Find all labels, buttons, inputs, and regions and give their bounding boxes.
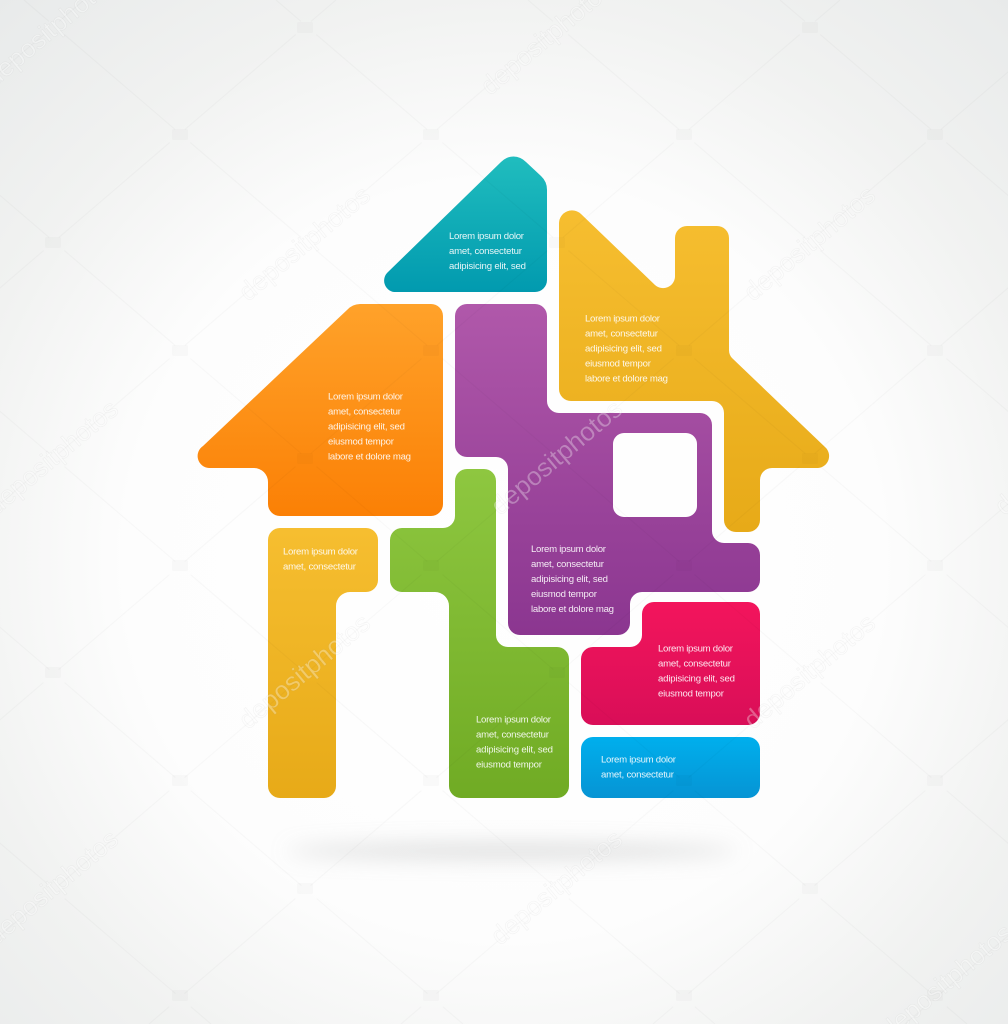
- text: orange panel: Lorem ipsum dolor: [328, 392, 404, 402]
- panel: left wall (yellow): [268, 528, 378, 798]
- text: pink panel: adipisicing elit, sed: [658, 674, 735, 684]
- text: teal panel: adipisicing elit, sed: [449, 261, 526, 272]
- text: orange panel: eiusmod tempor: [328, 436, 395, 448]
- panel: foundation (blue): [581, 737, 760, 798]
- text: pink panel: amet, consectetur: [658, 658, 732, 670]
- text: yellow roof panel: amet, consectetur: [585, 328, 659, 340]
- text: left wall panel: Lorem ipsum dolor: [283, 546, 359, 558]
- text: orange panel: [328, 392, 411, 462]
- panel: left roof (orange): [198, 304, 443, 516]
- watermarks: depositphotos: [738, 608, 881, 735]
- text: teal panel: Lorem ipsum dolor: [449, 231, 525, 242]
- text: pink panel: eiusmod tempor: [658, 688, 725, 700]
- panel: roof peak (teal): [384, 157, 547, 292]
- watermarks: depositphotos: [233, 180, 376, 307]
- panel: centre with window (purple): [455, 304, 760, 635]
- text: purple panel: Lorem ipsum dolor: [531, 544, 607, 555]
- text: purple panel: amet, consectetur: [531, 559, 605, 570]
- text: yellow roof panel: [585, 314, 668, 384]
- text: pink panel: Lorem ipsum dolor: [658, 644, 734, 654]
- text: green panel: amet, consectetur: [476, 730, 550, 740]
- text: green panel: [476, 714, 553, 770]
- text: pink panel: [658, 644, 735, 700]
- text: orange panel: labore et dolore mag: [328, 452, 411, 462]
- text: blue panel: [601, 754, 677, 780]
- watermarks: depositphotos: [738, 180, 881, 307]
- text: teal panel: [449, 231, 526, 272]
- text: orange panel: amet, consectetur: [328, 406, 402, 418]
- ground shadow: [287, 843, 737, 859]
- text: green panel: eiusmod tempor: [476, 760, 543, 770]
- text: yellow roof panel: adipisicing elit, sed: [585, 344, 662, 354]
- text: orange panel: adipisicing elit, sed: [328, 422, 405, 432]
- panel: lower right (pink): [581, 602, 760, 725]
- text: purple panel: adipisicing elit, sed: [531, 574, 608, 585]
- text: yellow roof panel: labore et dolore mag: [585, 374, 668, 384]
- watermarks: depositphotos: [233, 608, 376, 735]
- text: blue panel: Lorem ipsum dolor: [601, 754, 677, 766]
- watermarks: depositphotos: [485, 394, 628, 521]
- panel: right roof with chimney (yellow): [559, 210, 829, 532]
- panel: door frame (green): [390, 469, 569, 798]
- text: green panel: Lorem ipsum dolor: [476, 714, 552, 726]
- text: blue panel: amet, consectetur: [601, 770, 675, 780]
- text: teal panel: amet, consectetur: [449, 246, 523, 257]
- text: yellow roof panel: Lorem ipsum dolor: [585, 314, 661, 324]
- text: purple panel: labore et dolore mag: [531, 604, 614, 615]
- watermarks: depositphotos: [485, 824, 628, 951]
- text: yellow roof panel: eiusmod tempor: [585, 358, 652, 370]
- text: left wall panel: amet, consectetur: [283, 562, 357, 572]
- text: green panel: adipisicing elit, sed: [476, 744, 553, 756]
- text: purple panel: eiusmod tempor: [531, 589, 598, 600]
- text: left wall panel: [283, 546, 359, 572]
- text: purple panel: [531, 544, 614, 615]
